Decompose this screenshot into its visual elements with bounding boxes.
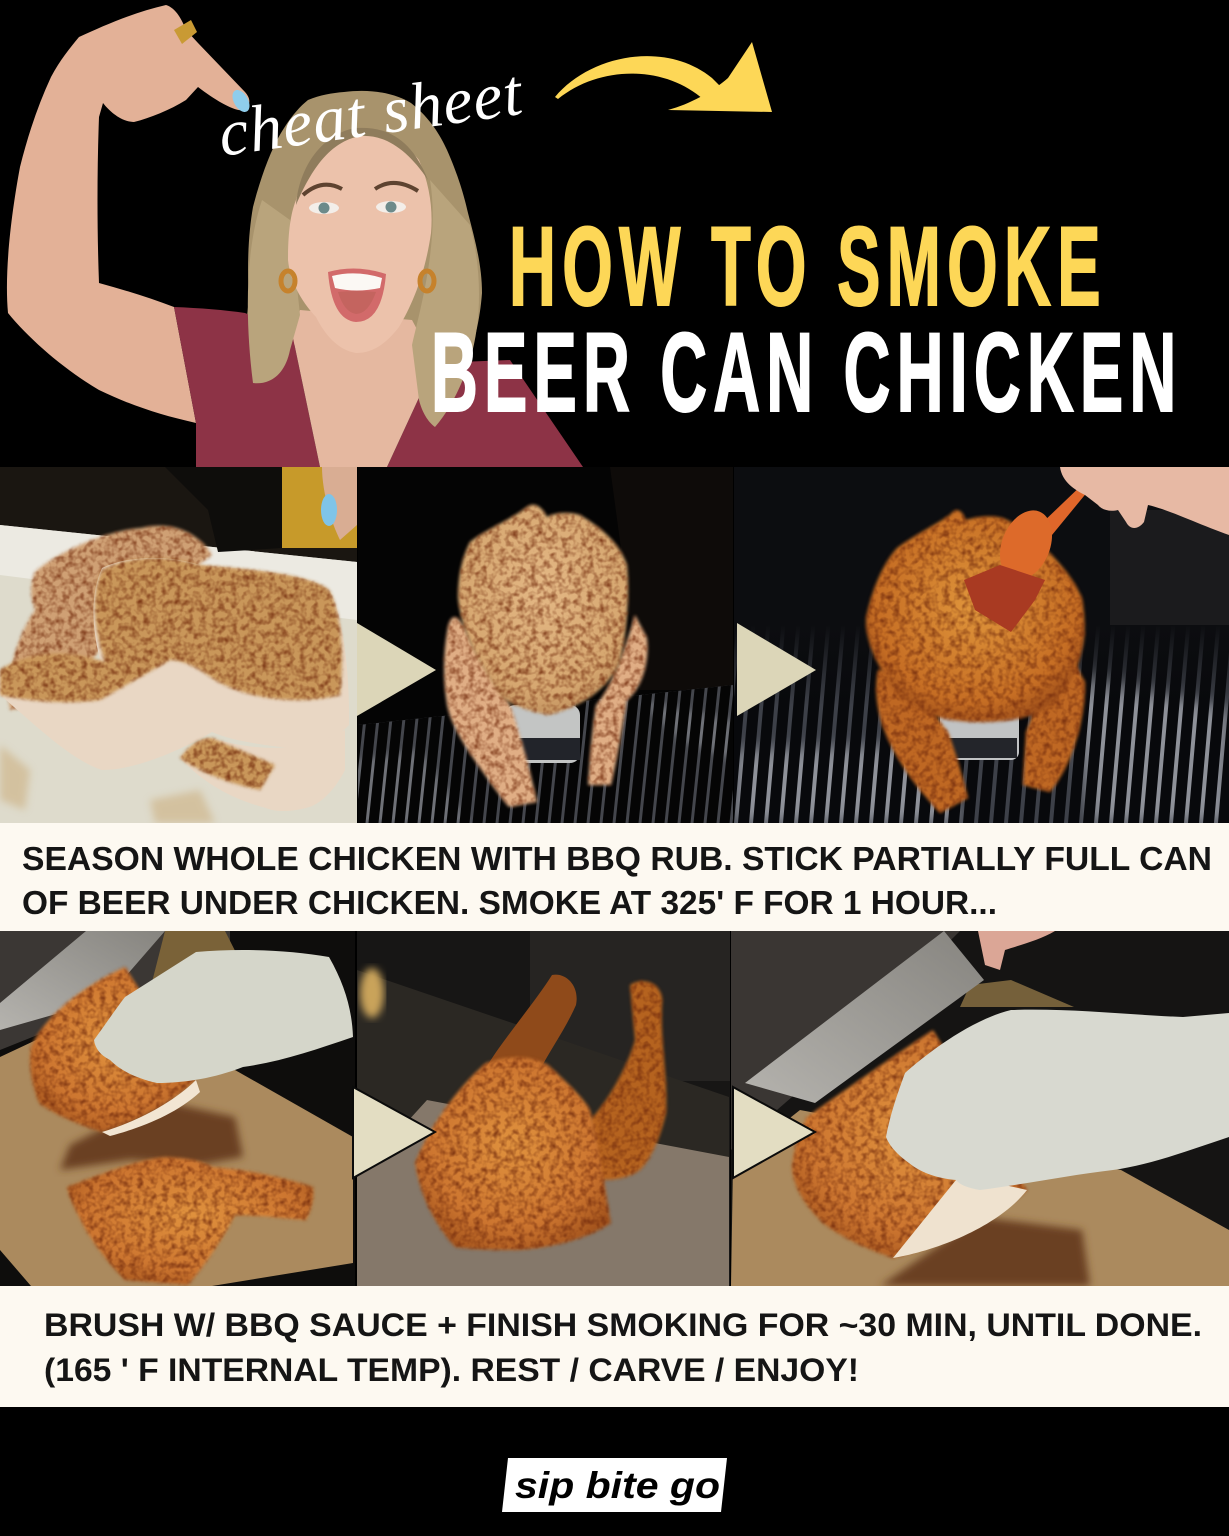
juice stain bbox=[880, 1217, 1090, 1286]
caption strip 2 bbox=[0, 1286, 1229, 1407]
chicken body pale bbox=[0, 558, 349, 770]
title: BEER CAN CHICKEN bbox=[431, 311, 1176, 435]
hair parting bbox=[296, 128, 428, 205]
body bbox=[458, 505, 628, 715]
grill bbox=[734, 625, 1229, 823]
earrings bbox=[281, 271, 295, 291]
beer can bbox=[505, 705, 580, 763]
title: HOW TO SMOKE bbox=[509, 205, 1101, 329]
shirt bbox=[174, 307, 583, 467]
face bbox=[288, 133, 432, 353]
title bbox=[431, 205, 1176, 435]
legs bbox=[876, 670, 968, 813]
photo 4: carved chicken bbox=[0, 931, 355, 1286]
mouth bbox=[328, 268, 386, 322]
caption strip 2: (165 ' F INTERNAL TEMP). REST / CARVE / ENJOY! bbox=[44, 1352, 859, 1388]
body bbox=[866, 510, 1085, 722]
header photo: woman pointing bbox=[7, 5, 583, 467]
knife bbox=[0, 931, 165, 1030]
cutting board bbox=[0, 1010, 353, 1286]
granite counter bbox=[357, 970, 729, 1177]
logo: sip bite go: sip bite go bbox=[515, 1465, 720, 1506]
neck and chest bbox=[292, 310, 435, 467]
brush bbox=[1040, 480, 1093, 535]
spilled rub bbox=[0, 745, 215, 823]
logo: sip bite go bbox=[502, 1458, 727, 1512]
legs and wings bbox=[444, 617, 537, 807]
can bbox=[940, 705, 1019, 760]
body bbox=[415, 1057, 611, 1250]
hair locks front bbox=[248, 180, 479, 427]
hand bbox=[1060, 467, 1229, 535]
photo 3: brushing sauce bbox=[734, 467, 1229, 823]
chicken bbox=[792, 1030, 1027, 1258]
rear wing and thigh bbox=[9, 526, 212, 710]
photo 6: carving chicken close up bbox=[731, 931, 1229, 1286]
photo 1: seasoning raw chicken bbox=[0, 467, 357, 823]
hand with blue nail bbox=[322, 467, 357, 540]
hair back bbox=[246, 91, 482, 383]
drumsticks bbox=[478, 975, 577, 1085]
lower leg bbox=[180, 730, 345, 811]
arrow: yellow curved bbox=[555, 42, 772, 112]
caption strip 1: OF BEER UNDER CHICKEN. SMOKE AT 325' F FOR 1 HOUR... bbox=[22, 884, 997, 921]
nail bbox=[229, 87, 253, 115]
play arrows row 2 bbox=[353, 1087, 815, 1178]
rub on chicken bbox=[0, 558, 342, 702]
grill bbox=[358, 685, 733, 823]
glove bbox=[886, 1010, 1229, 1190]
play arrows row 1 bbox=[357, 623, 816, 716]
juice stain bbox=[60, 1100, 243, 1170]
lower chicken piece bbox=[67, 1157, 313, 1285]
glove bbox=[94, 950, 353, 1083]
caption strip 1: SEASON WHOLE CHICKEN WITH BBQ RUB. STICK PARTIALLY FULL CAN bbox=[22, 840, 1212, 877]
ring bbox=[174, 20, 197, 44]
rub bottle bbox=[165, 467, 282, 552]
wood board bbox=[357, 1100, 729, 1286]
arm and pointing hand bbox=[7, 5, 249, 423]
photo 2: chicken on can in smoker bbox=[358, 467, 733, 823]
knife bbox=[745, 931, 984, 1103]
fingers bbox=[978, 931, 1055, 970]
cheat sheet script label: cheat sheet bbox=[214, 56, 528, 171]
caption strip 1 bbox=[0, 823, 1229, 931]
photo 5: whole smoked chicken bbox=[357, 931, 730, 1286]
upper chicken piece bbox=[30, 967, 196, 1132]
cutting board bbox=[731, 1110, 1229, 1286]
caption strip 2: BRUSH W/ BBQ SAUCE + FINISH SMOKING FOR ~30 MIN, UNTIL DONE. bbox=[44, 1307, 1202, 1343]
eyes bbox=[309, 202, 339, 214]
